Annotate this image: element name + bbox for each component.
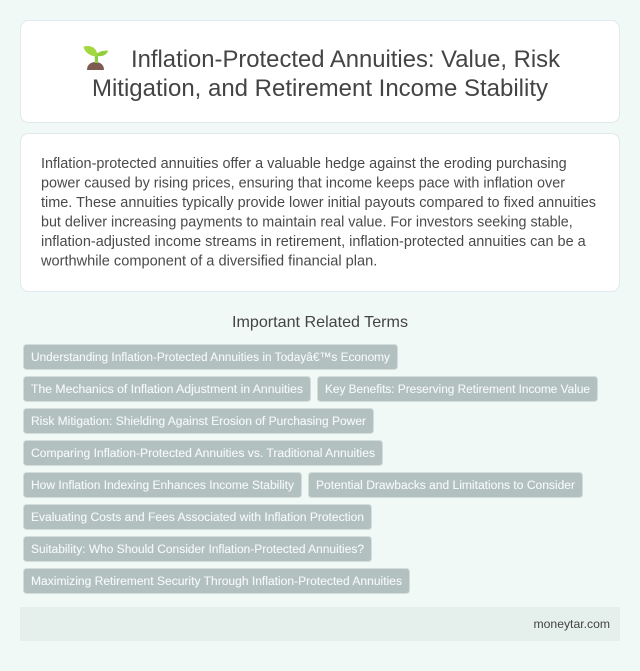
tag: Maximizing Retirement Security Through Inflation-Protected Annuities	[31, 574, 402, 588]
text block: description: time. These annuities typically provide lower initial payouts compared to fixed annuities	[41, 195, 596, 211]
tag	[308, 472, 582, 498]
tag: Evaluating Costs and Fees Associated with Inflation Protection	[31, 510, 364, 524]
tag	[24, 376, 310, 402]
text block: description: but deliver increasing payments to maintain real value. For investors seeking stable,	[41, 214, 573, 230]
footer text: moneytar.com	[534, 617, 610, 631]
heading: related terms: Important Related Terms	[232, 314, 408, 331]
tag	[24, 536, 372, 562]
tag	[24, 504, 372, 530]
tag: Suitability: Who Should Consider Inflation-Protected Annuities?	[31, 542, 364, 556]
tag: Comparing Inflation-Protected Annuities vs. Traditional Annuities	[31, 446, 375, 460]
tag: Potential Drawbacks and Limitations to Consider	[316, 478, 575, 492]
text block: description: inflation-adjusted income streams in retirement, inflation-protected annuities can be a	[41, 234, 587, 250]
tags: related terms	[24, 344, 598, 594]
title	[92, 46, 561, 102]
header panel	[20, 20, 620, 122]
tag	[24, 408, 374, 434]
tag: How Inflation Indexing Enhances Income Stability	[31, 478, 295, 492]
panel: description	[20, 134, 620, 292]
tag	[24, 440, 382, 466]
title: Mitigation, and Retirement Income Stability	[92, 75, 549, 102]
tag: The Mechanics of Inflation Adjustment in Annuities	[31, 382, 303, 396]
icon: sprout	[84, 46, 108, 70]
title: Inflation-Protected Annuities: Value, Risk	[131, 46, 561, 73]
tag	[24, 344, 398, 370]
tag: Understanding Inflation-Protected Annuities in Todayâ€™s Economy	[31, 350, 391, 364]
footer	[20, 607, 620, 641]
tag: Risk Mitigation: Shielding Against Erosion of Purchasing Power	[31, 414, 366, 428]
tag	[318, 376, 598, 402]
tag	[24, 472, 302, 498]
tag	[24, 568, 410, 594]
text block: description	[40, 156, 596, 270]
text block: description: power caused by rising prices, ensuring that income keeps pace with inflation over	[41, 176, 565, 192]
text block: description: worthwhile component of a diversified financial plan.	[40, 254, 377, 270]
text block: description: Inflation-protected annuities offer a valuable hedge against the eroding purchasing	[41, 156, 567, 172]
tag: Key Benefits: Preserving Retirement Income Value	[325, 382, 590, 396]
